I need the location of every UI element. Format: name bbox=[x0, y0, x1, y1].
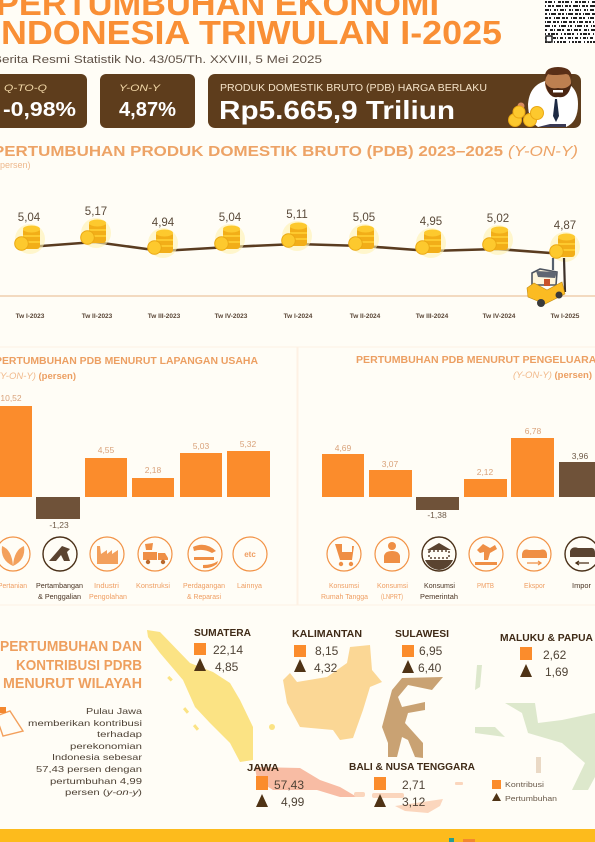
region stats: Maluku and Papua: 2,62 bbox=[543, 648, 567, 662]
text block: Java note bbox=[28, 706, 142, 797]
region stats: Maluku and Papua: MALUKU & PAPUA bbox=[500, 633, 593, 644]
stat card: q-to-q: -0,98% bbox=[3, 99, 76, 121]
line chart: GDP growth: Tw II-2023 bbox=[82, 313, 113, 320]
region stats: Bali and Nusa Tenggara bbox=[349, 762, 475, 809]
line chart: GDP growth: Tw I-2025 bbox=[551, 313, 580, 320]
map region: Bali and Nusa Tenggara bbox=[354, 782, 463, 813]
section heading: regional: PERTUMBUHAN DAN bbox=[0, 638, 142, 655]
icon: forklift bbox=[527, 258, 565, 307]
axis labels: industry: Perdagangan bbox=[183, 583, 225, 590]
text block: Java note: Pulau Jawa bbox=[86, 706, 142, 716]
icon: household consumption bbox=[327, 537, 361, 571]
axis labels: expenditure: Konsumsi bbox=[377, 583, 408, 590]
icon: clipboard bbox=[0, 707, 23, 736]
line chart: GDP growth: Tw I-2023 bbox=[16, 313, 45, 320]
axis labels: expenditure: Konsumsi bbox=[424, 583, 455, 590]
axis labels: industry: & Penggalian bbox=[38, 594, 81, 601]
text block: Java note: persen ( y-on-y ) bbox=[65, 787, 142, 797]
axis labels: expenditure: Impor bbox=[572, 583, 592, 590]
text block: Java note: terhadap bbox=[97, 729, 142, 739]
text block: Java note: pertumbuhan 4,99 bbox=[50, 776, 142, 786]
axis labels: industry: Pengolahan bbox=[89, 594, 127, 601]
axis labels: industry: Industri bbox=[94, 583, 119, 590]
region stats: Jawa: 57,43 bbox=[274, 778, 304, 792]
section heading: GDP growth: (Y-ON-Y) bbox=[508, 144, 578, 160]
axis labels: industry: Lainnya bbox=[237, 583, 262, 590]
bar chart: expenditure: 3,07 bbox=[382, 459, 399, 469]
map region: Sulawesi bbox=[382, 677, 443, 758]
icon: businessman with coins bbox=[508, 67, 578, 127]
region stats: Kalimantan: 8,15 bbox=[315, 644, 339, 658]
map region: Sumatera bbox=[147, 630, 275, 762]
region stats: Kalimantan bbox=[292, 629, 362, 675]
region stats: Sumatera bbox=[194, 628, 251, 674]
stat card: nominal GDP bbox=[208, 74, 581, 128]
footer band bbox=[0, 829, 595, 842]
line chart: GDP growth: 4,95 bbox=[420, 216, 442, 228]
stat card: q-to-q bbox=[0, 74, 87, 128]
bar chart: industry: 10,52 bbox=[0, 393, 22, 403]
line chart: GDP growth: Tw I-2024 bbox=[284, 313, 313, 320]
stat card: nominal GDP: Rp5.665,9 Triliun bbox=[219, 95, 455, 125]
axis labels: industry bbox=[0, 583, 262, 601]
section heading: regional: MENURUT WILAYAH bbox=[3, 675, 142, 692]
panel heading: expenditure: (Y-ON-Y) (persen) bbox=[513, 370, 592, 381]
region stats: Sulawesi: 6,95 bbox=[419, 644, 443, 658]
region stats: Maluku and Papua bbox=[500, 633, 593, 679]
line chart: GDP growth: 4,94 bbox=[152, 217, 175, 229]
region stats: Jawa: JAWA bbox=[247, 763, 279, 774]
stat card: y-on-y: 4,87% bbox=[119, 99, 176, 121]
line chart: GDP growth: Tw IV-2024 bbox=[483, 313, 516, 320]
panel: growth by expenditure bbox=[298, 347, 595, 605]
icon: export bbox=[517, 537, 551, 571]
icon: investment bbox=[469, 537, 503, 571]
region stats: Bali and Nusa Tenggara: BALI & NUSA TENGGARA bbox=[349, 762, 475, 773]
stat card: y-on-y: Y-ON-Y bbox=[119, 83, 161, 94]
text block: Java note: memberikan kontribusi bbox=[28, 718, 142, 728]
stat card: q-to-q: Q-TO-Q bbox=[4, 83, 48, 94]
axis labels: expenditure: Rumah Tangga bbox=[321, 594, 368, 601]
section heading: regional: KONTRIBUSI PDRB bbox=[16, 657, 142, 674]
region stats: Bali and Nusa Tenggara: 2,71 bbox=[402, 778, 426, 792]
subtitle: Berita Resmi Statistik No. 43/05/Th. XXVIII, 5 Mei 2025 bbox=[0, 54, 322, 66]
line chart: GDP growth: 5,04 bbox=[18, 212, 41, 224]
bar chart: expenditure: 6,78 bbox=[525, 426, 542, 436]
region stats: Sulawesi bbox=[395, 629, 449, 675]
region stats: Jawa bbox=[247, 763, 305, 809]
axis labels: expenditure: PMTB bbox=[477, 583, 494, 590]
icon: others bbox=[233, 537, 267, 571]
icon: agriculture bbox=[0, 537, 30, 571]
bar chart: expenditure: 3,96 bbox=[572, 451, 589, 461]
region stats: Bali and Nusa Tenggara: 3,12 bbox=[402, 795, 426, 809]
bar chart: expenditure: 4,69 bbox=[335, 443, 352, 453]
legend bbox=[492, 780, 557, 803]
title bbox=[0, 0, 502, 52]
section heading: regional bbox=[0, 638, 142, 692]
bar chart: industry: 5,03 bbox=[193, 441, 210, 451]
line chart: GDP growth: 5,05 bbox=[353, 212, 375, 224]
region stats: Maluku and Papua: 1,69 bbox=[545, 665, 569, 679]
map of Indonesia bbox=[147, 630, 595, 813]
line chart: GDP growth bbox=[0, 206, 595, 320]
axis labels: expenditure bbox=[321, 583, 592, 601]
stat card: nominal GDP: PRODUK DOMESTIK BRUTO (PDB) HARGA BERLAKU bbox=[220, 82, 487, 94]
line chart: GDP growth: Tw IV-2023 bbox=[215, 313, 248, 320]
region stats: Kalimantan: KALIMANTAN bbox=[292, 629, 362, 640]
region stats: Kalimantan: 4,32 bbox=[314, 661, 338, 675]
icon: import bbox=[565, 537, 595, 571]
axis labels: expenditure: Pemerintah bbox=[420, 594, 458, 601]
axis labels: industry: Konstruksi bbox=[136, 583, 170, 590]
text block: Java note: 57,43 persen dengan bbox=[36, 764, 142, 774]
icon: mining bbox=[43, 537, 77, 571]
panel heading: industry bbox=[0, 355, 258, 382]
bar chart: expenditure: 2,12 bbox=[477, 467, 494, 477]
bar chart: industry: 4,55 bbox=[98, 445, 115, 455]
section heading: GDP growth bbox=[0, 144, 578, 170]
region stats: Jawa: 4,99 bbox=[281, 795, 305, 809]
line chart: GDP growth: 5,04 bbox=[219, 212, 242, 224]
region stats: Sumatera: 22,14 bbox=[213, 643, 243, 657]
region stats: Sumatera: 4,85 bbox=[215, 660, 239, 674]
section heading: GDP growth: PERTUMBUHAN PRODUK DOMESTIK BRUTO (PDB) 2023–2025 bbox=[0, 144, 503, 160]
title: INDONESIA TRIWULAN I-2025 bbox=[0, 15, 502, 52]
icon: construction bbox=[138, 537, 172, 571]
line chart: GDP growth: Tw III-2024 bbox=[416, 313, 449, 320]
map region: Maluku and Papua bbox=[475, 665, 595, 790]
region stats: Sulawesi: 6,40 bbox=[418, 661, 442, 675]
axis labels: expenditure: (LNPRT) bbox=[381, 594, 403, 601]
axis labels: industry: Pertambangan bbox=[36, 583, 83, 590]
region stats: Sulawesi: SULAWESI bbox=[395, 629, 449, 640]
text block: Java note: perekonomian bbox=[70, 741, 142, 751]
line chart: GDP growth: 5,11 bbox=[286, 209, 308, 221]
map region: Kalimantan bbox=[283, 645, 382, 740]
bar chart: industry: 5,32 bbox=[240, 439, 257, 449]
bar chart: industry bbox=[0, 393, 270, 530]
axis labels: expenditure: Konsumsi bbox=[329, 583, 359, 590]
panel heading: industry: PERTUMBUHAN PDB MENURUT LAPANGAN USAHA bbox=[0, 355, 258, 367]
axis labels: expenditure: Ekspor bbox=[524, 583, 546, 590]
legend: Kontribusi bbox=[505, 780, 544, 789]
bar chart: expenditure: -1,38 bbox=[427, 510, 447, 520]
icon: others: etc bbox=[244, 550, 256, 559]
QR code bbox=[545, 0, 595, 43]
region stats: Sumatera: SUMATERA bbox=[194, 628, 251, 639]
axis labels: industry: & Reparasi bbox=[187, 594, 221, 601]
icon: trade bbox=[188, 537, 222, 571]
icon: manufacturing bbox=[90, 537, 124, 571]
text block: Java note: Indonesia sebesar bbox=[52, 752, 142, 762]
line chart: GDP growth: Tw II-2024 bbox=[350, 313, 381, 320]
stat card: y-on-y bbox=[100, 74, 195, 128]
line chart: GDP growth: 5,17 bbox=[85, 206, 107, 218]
line chart: GDP growth: 4,87 bbox=[554, 220, 576, 232]
panel: growth by industry bbox=[0, 347, 297, 605]
bar chart: expenditure bbox=[322, 426, 595, 520]
icon: nonprofit consumption bbox=[375, 537, 409, 571]
line chart: GDP growth: 5,02 bbox=[487, 213, 509, 225]
icon: government consumption bbox=[422, 537, 456, 571]
bar chart: industry: -1,23 bbox=[49, 520, 69, 530]
bar chart: industry: 2,18 bbox=[145, 465, 162, 475]
panel heading: expenditure bbox=[356, 354, 595, 381]
map region: Jawa bbox=[255, 767, 357, 797]
line chart: GDP growth: Tw III-2023 bbox=[148, 313, 181, 320]
legend: Pertumbuhan bbox=[505, 794, 557, 803]
